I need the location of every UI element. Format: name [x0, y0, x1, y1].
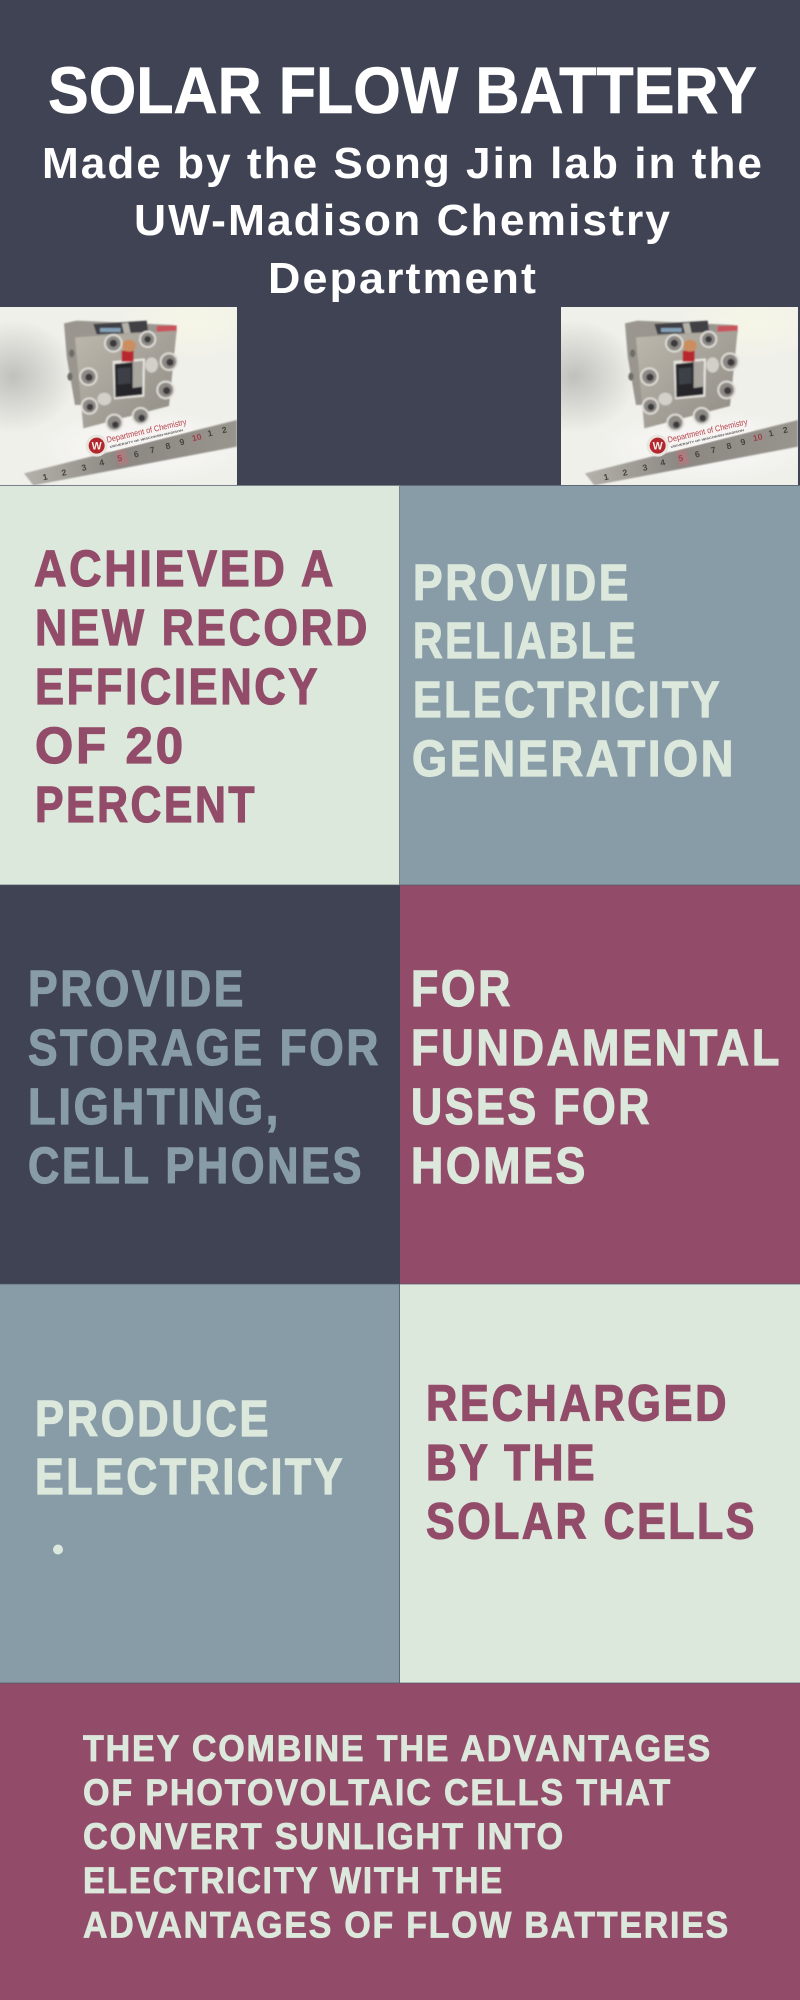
text: produce electricity: PRODUCE — [35, 1390, 271, 1447]
panel: summary — [0, 1683, 800, 2000]
text: achieved a new record efficiency: NEW RECORD — [35, 599, 370, 656]
text: provide reliable electricity generation: ELECTRICITY — [413, 671, 722, 728]
panel: produce electricity — [0, 1284, 400, 1683]
text: for fundamental uses for homes: FOR — [411, 960, 513, 1017]
text: they combine the advantages: THEY COMBINE THE ADVANTAGES — [83, 1727, 712, 1769]
photo: battery device left — [0, 287, 273, 485]
bullet dot — [53, 1544, 63, 1554]
text: provide reliable electricity generation: PROVIDE — [413, 554, 631, 611]
text: provide storage for lighting, cell phones: PROVIDE — [28, 960, 246, 1017]
panel: fundamental uses — [400, 885, 800, 1284]
text: provide reliable electricity generation: GENERATION — [412, 730, 736, 787]
text: achieved a new record efficiency: OF 20 — [35, 717, 186, 774]
text: provide storage for lighting, cell phones: LIGHTING, — [28, 1078, 281, 1135]
text: recharged by the solar cells: BY THE — [426, 1434, 597, 1491]
text: achieved a new record efficiency: EFFICIENCY — [35, 658, 320, 715]
text: provide storage for lighting, cell phones: STORAGE FOR — [28, 1019, 381, 1076]
text: for fundamental uses for homes — [411, 960, 782, 1194]
panel: recharged by solar cells — [400, 1284, 800, 1683]
text: achieved a new record efficiency — [34, 540, 370, 833]
text: provide reliable electricity generation: RELIABLE — [413, 612, 638, 669]
panel: storage — [0, 885, 400, 1284]
text: they combine the advantages: OF PHOTOVOLTAIC CELLS THAT — [83, 1771, 672, 1813]
text: they combine the advantages — [83, 1727, 730, 1946]
panel: header — [0, 0, 800, 485]
text: for fundamental uses for homes: USES FOR — [411, 1078, 652, 1135]
text: they combine the advantages: ELECTRICITY WITH THE — [83, 1859, 504, 1901]
text: they combine the advantages: ADVANTAGES OF FLOW BATTERIES — [83, 1904, 730, 1946]
text: achieved a new record efficiency: ACHIEVED A — [34, 540, 336, 597]
subtitle: UW-Madison Chemistry — [134, 197, 672, 245]
text: recharged by the solar cells: RECHARGED — [426, 1374, 729, 1432]
text: produce electricity: ELECTRICITY — [35, 1448, 345, 1505]
panel: record efficiency — [0, 485, 400, 885]
text: provide reliable electricity generation — [412, 554, 736, 787]
title: SOLAR FLOW BATTERY — [48, 53, 757, 127]
text: provide storage for lighting, cell phones: CELL PHONES — [28, 1137, 364, 1194]
subtitle: Made by the Song Jin lab in the — [42, 140, 764, 188]
text: recharged by the solar cells — [426, 1374, 757, 1550]
subtitle — [42, 140, 764, 303]
text: provide storage for lighting, cell phones — [28, 960, 381, 1194]
text: they combine the advantages: CONVERT SUNLIGHT INTO — [83, 1815, 565, 1857]
text: produce electricity — [35, 1390, 345, 1505]
subtitle: Department — [268, 255, 538, 303]
photo: battery device right — [511, 287, 800, 485]
panel: reliable electricity — [400, 485, 800, 885]
text: for fundamental uses for homes: HOMES — [411, 1137, 588, 1194]
text: achieved a new record efficiency: PERCENT — [35, 776, 257, 833]
